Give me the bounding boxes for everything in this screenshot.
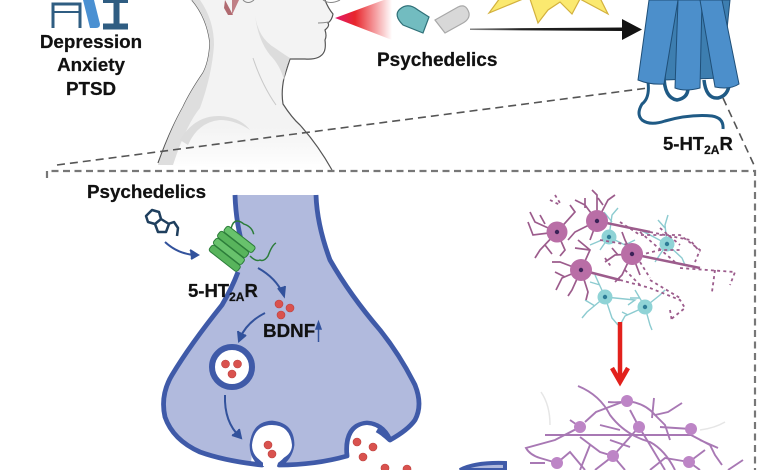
illustration: postsynaptic membrane xyxy=(460,463,505,470)
arrow: receptor to BDNF xyxy=(258,268,285,296)
icon: person on chair at table xyxy=(53,0,128,28)
icon: psychedelic capsules xyxy=(397,6,469,33)
label: psychedelics inset: Psychedelics xyxy=(87,181,206,202)
text: conditions xyxy=(40,31,142,99)
vesicle with BDNF xyxy=(212,347,252,387)
text: conditions: Depression xyxy=(40,31,142,52)
illustration: regrown purple neurons xyxy=(526,386,743,470)
icon: psychedelic molecule xyxy=(146,210,178,236)
label: 5-HT2AR receptor: R xyxy=(719,133,733,154)
label: 5-HT2AR receptor: 5-HT xyxy=(663,133,704,154)
red inhalation cone xyxy=(335,0,392,40)
arrow: BDNF up xyxy=(316,322,321,342)
icon: yellow star burst xyxy=(489,0,608,23)
illustration: 5-HT2A receptor xyxy=(638,0,739,129)
label: BDNF: BDNF xyxy=(263,320,315,341)
illustration: presynaptic neuron terminal xyxy=(164,195,419,466)
arrow: vesicle to membrane xyxy=(225,395,241,438)
zoom dashed lines xyxy=(57,88,754,165)
label: 5-HT2AR in synapse: 2A xyxy=(229,290,245,304)
arrow: molecule to receptor xyxy=(165,242,198,259)
label: 5-HT2AR in synapse: 5-HT xyxy=(188,280,229,301)
fusing vesicle and released BDNF xyxy=(252,425,411,470)
icon: green receptor xyxy=(207,215,263,272)
arrow: psychedelics to receptor xyxy=(470,19,642,40)
text: conditions: Anxiety xyxy=(57,54,125,75)
illustration: human head and neck xyxy=(158,0,340,170)
text: psychedelics: Psychedelics xyxy=(377,50,497,71)
label: 5-HT2AR receptor: 2A xyxy=(704,143,720,157)
text: conditions: PTSD xyxy=(66,78,116,99)
receptor tail xyxy=(250,243,276,260)
label: 5-HT2AR in synapse: R xyxy=(244,280,258,301)
arrow: BDNF to vesicle xyxy=(238,313,265,341)
panel: dashed detail box xyxy=(47,171,755,470)
illustration: atrophied purple neurons xyxy=(528,190,735,322)
arrow: red downward xyxy=(612,322,628,382)
BDNF particles xyxy=(275,300,294,319)
illustration: cyan neurons xyxy=(582,208,685,330)
